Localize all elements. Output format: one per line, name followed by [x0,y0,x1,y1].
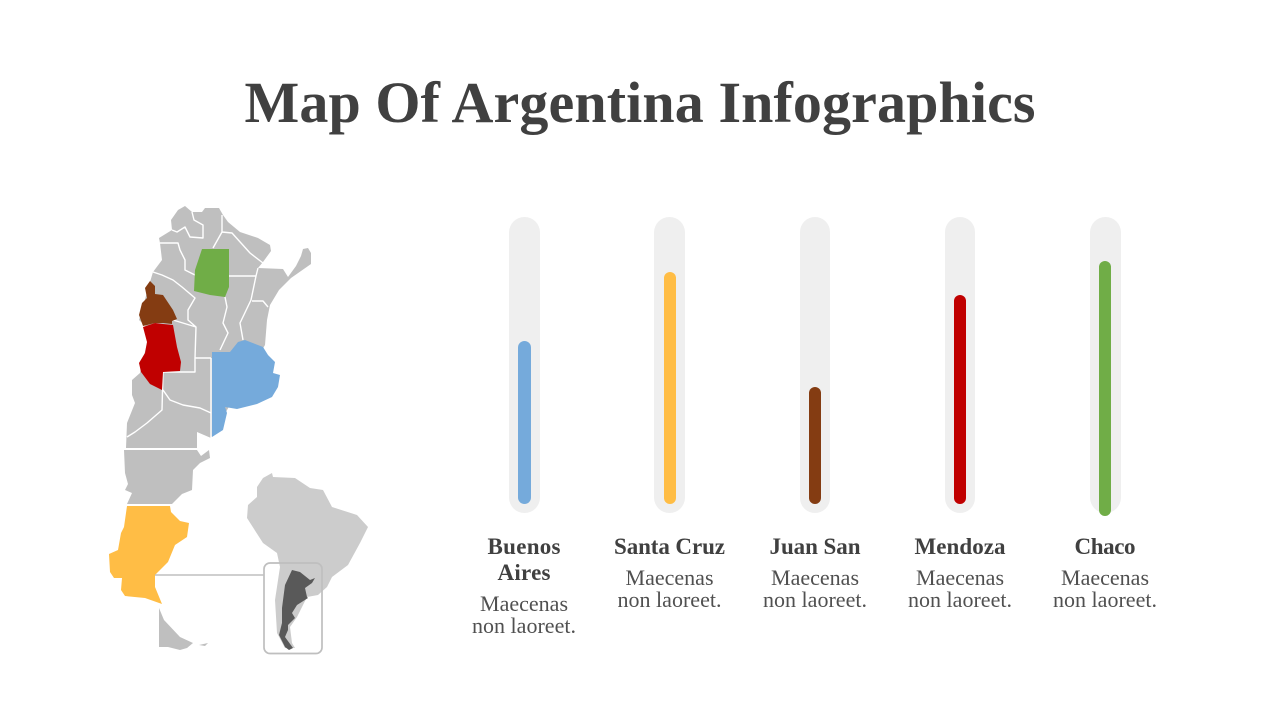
province: Buenos Aires [212,340,280,437]
inset: South America [247,473,368,648]
bar fill [954,295,966,504]
bar track [945,217,975,513]
province: Santa Cruz [109,506,189,604]
label: Mendoza [914,534,1006,559]
label: Juan San [770,534,861,559]
column: Mendoza [908,217,1012,612]
bar fill [1099,261,1111,516]
description: Maecenas [771,565,859,590]
province: San Juan [139,281,177,326]
bar fill [809,387,821,504]
bar track [800,217,830,513]
connector line [155,574,264,576]
column: Santa Cruz [614,217,725,612]
description: Maecenas [480,591,568,616]
bar track [654,217,685,513]
description second line: non laoreet. [908,587,1012,612]
title: Map Of Argentina Infographics [244,70,1036,135]
inset: Argentina highlighted [279,570,315,650]
description: Maecenas [626,565,714,590]
inset frame [264,563,322,654]
grey provinces [124,206,311,650]
bar fill [664,272,676,504]
column: Juan San [763,217,867,612]
label: Chaco [1074,534,1136,559]
description: Maecenas [916,565,1004,590]
description second line: non laoreet. [472,613,576,638]
label: Buenos [488,534,561,559]
province: Mendoza [139,323,181,390]
map of Argentina [109,206,368,654]
label second line: Aires [498,560,551,585]
bar fill [518,341,531,504]
description: Maecenas [1061,565,1149,590]
label: Santa Cruz [614,534,725,559]
province: Chaco [194,249,229,297]
description second line: non laoreet. [618,587,722,612]
description second line: non laoreet. [763,587,867,612]
bar track [1090,217,1121,513]
column: Buenos Aires [472,217,576,638]
description second line: non laoreet. [1053,587,1157,612]
column: Chaco [1053,217,1157,612]
bar track [509,217,540,513]
